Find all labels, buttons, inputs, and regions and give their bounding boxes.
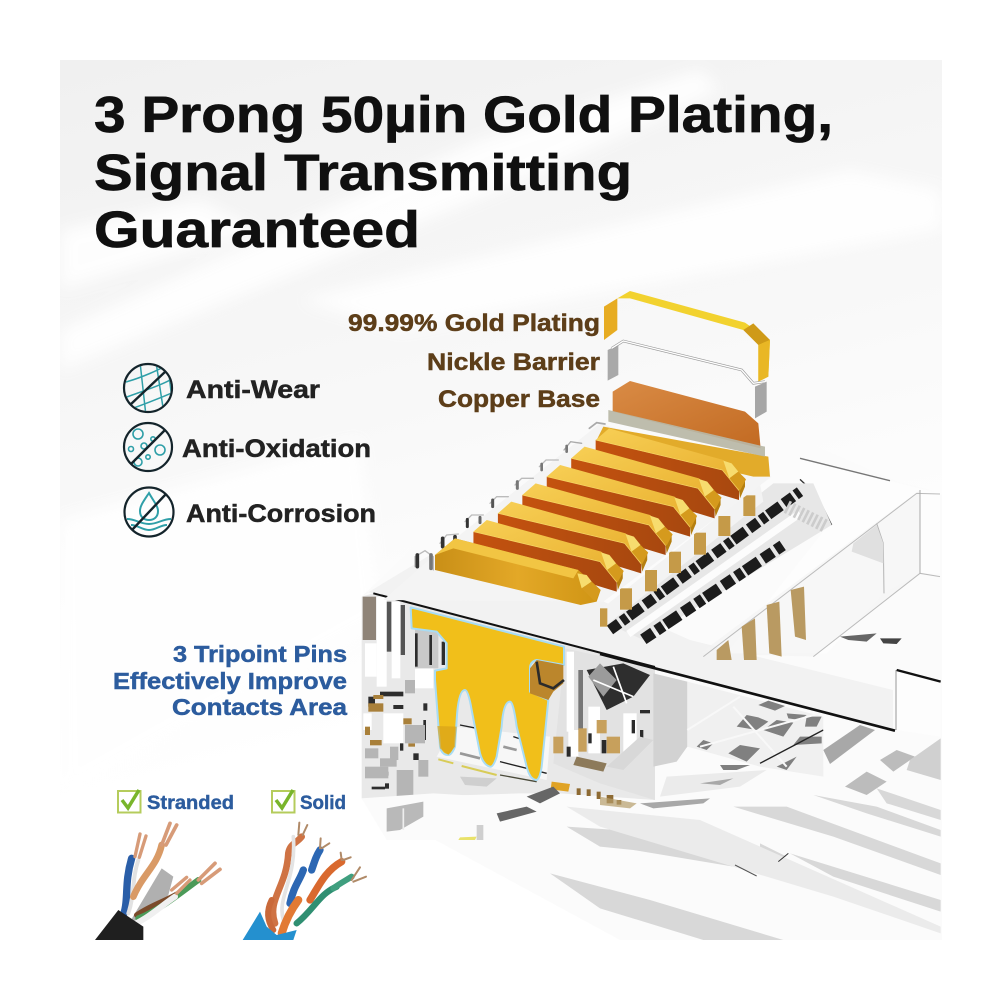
label: anti-oxidation: Anti-Oxidation — [182, 435, 371, 463]
check: solid — [272, 790, 294, 812]
top right plane — [720, 456, 942, 560]
transparent front face — [362, 593, 655, 840]
title: Signal Transmitting — [94, 144, 632, 201]
tripoint label: 3 Tripoint Pins — [173, 641, 347, 667]
cable: solid — [243, 823, 366, 940]
gold pins and plating layers — [383, 291, 772, 605]
pin window dark/gold details — [553, 648, 655, 800]
exploded nickel layer — [608, 341, 767, 418]
exploded gold layer — [604, 291, 770, 382]
lower parts — [362, 793, 633, 840]
title: 3 Prong 50µin Gold Plating, — [94, 86, 833, 143]
cable: stranded — [95, 823, 220, 940]
housing body — [362, 440, 942, 940]
rear pin layers — [597, 410, 770, 477]
label: stranded: Stranded — [147, 793, 234, 814]
tripoint label: Contacts Area — [172, 694, 347, 720]
icon: anti-corrosion — [124, 488, 174, 536]
yellow tripoint pin — [411, 607, 564, 780]
check: stranded — [118, 790, 140, 812]
label: solid: Solid — [300, 793, 346, 814]
feature list — [124, 362, 376, 536]
icon: anti-wear — [124, 362, 174, 416]
title — [94, 86, 833, 258]
plating layer labels — [348, 310, 600, 413]
icon: anti-oxidation — [124, 423, 172, 471]
region under teeth — [437, 727, 550, 780]
plating layer labels: Nickle Barrier — [427, 349, 600, 376]
exploded copper layer — [613, 381, 761, 448]
stripes and grey blocks lower right — [550, 654, 941, 940]
plating layer labels: 99.99% Gold Plating — [348, 310, 600, 337]
rear detail — [600, 458, 940, 660]
seven pins — [435, 428, 746, 605]
stranded and solid options — [95, 790, 366, 940]
title: Guaranteed — [94, 201, 420, 258]
plastic rails — [383, 423, 772, 602]
tripoint label — [113, 641, 347, 720]
tripoint label: Effectively Improve — [113, 668, 347, 694]
label: anti-wear: Anti-Wear — [186, 376, 320, 404]
label: anti-corrosion: Anti-Corrosion — [186, 500, 376, 528]
plating layer labels: Copper Base — [438, 386, 600, 413]
connector housing — [362, 440, 942, 940]
